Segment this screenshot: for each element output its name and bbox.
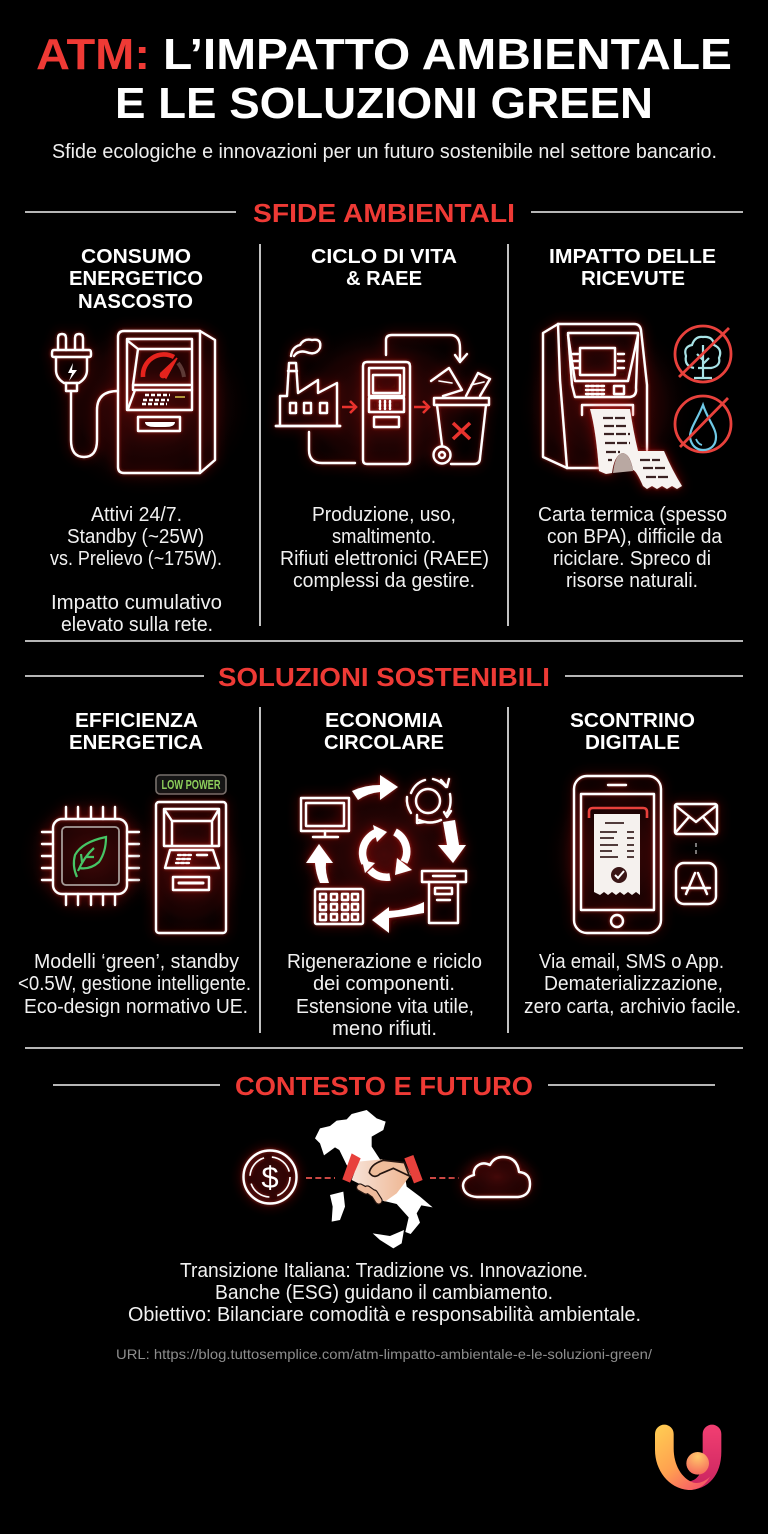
icon: low power badge bbox=[156, 775, 226, 794]
heading: efficienza: EFFICIENZA bbox=[75, 709, 198, 732]
italy map bbox=[315, 1110, 433, 1248]
icon: plug and atm with gauge bbox=[45, 310, 255, 500]
url: URL: https://blog.tuttosemplice.com/atm-limpatto-ambientale-e-le-soluzioni-green/ bbox=[116, 1346, 652, 1362]
heading: consumo: CONSUMO bbox=[81, 245, 191, 268]
text: scontrino: Via email, SMS o App. bbox=[539, 951, 724, 973]
panel: impatto delle ricevute bbox=[515, 245, 731, 592]
icon: circular economy loop bbox=[284, 770, 484, 940]
heading: consumo: NASCOSTO bbox=[78, 290, 193, 313]
text: contesto bbox=[128, 1260, 641, 1326]
heading: ciclo bbox=[311, 245, 457, 290]
text: scontrino: Dematerializzazione, bbox=[544, 973, 723, 995]
icon: no trees bbox=[675, 326, 731, 382]
heading: scontrino: DIGITALE bbox=[585, 731, 680, 754]
handshake bbox=[342, 1153, 423, 1202]
heading: ricevute: IMPATTO DELLE bbox=[549, 245, 716, 268]
heading: consumo bbox=[69, 245, 203, 313]
heading: scontrino: SCONTRINO bbox=[570, 709, 695, 732]
text: ciclo: Produzione, uso, bbox=[312, 504, 456, 526]
text: efficienza: Eco-design normativo UE. bbox=[24, 996, 248, 1018]
text: efficienza bbox=[18, 951, 251, 1018]
panel: scontrino digitale bbox=[524, 709, 741, 1018]
text: economia: dei componenti. bbox=[313, 973, 455, 995]
icon: app tile bbox=[676, 843, 716, 904]
icon: phone with digital receipt bbox=[543, 770, 693, 940]
heading: economia bbox=[324, 709, 444, 754]
heading: economia: ECONOMIA bbox=[325, 709, 443, 732]
icon: atm with receipt bbox=[515, 315, 695, 495]
icon: cloud bbox=[449, 1147, 545, 1207]
icon: dollar coin: $ bbox=[261, 1160, 279, 1195]
text: ciclo: Rifiuti elettronici (RAEE) bbox=[280, 548, 489, 570]
title: L’IMPATTO AMBIENTALE bbox=[163, 30, 732, 79]
text: economia: Rigenerazione e riciclo bbox=[287, 951, 482, 973]
text: efficienza: Modelli ‘green’, standby bbox=[34, 951, 239, 973]
heading: ricevute: RICEVUTE bbox=[581, 267, 685, 290]
icon: green chip bbox=[17, 786, 167, 926]
text: ciclo: complessi da gestire. bbox=[293, 570, 475, 592]
text: ricevute bbox=[538, 504, 727, 592]
panel: efficienza energetica bbox=[17, 709, 251, 1018]
panel: ciclo di vita bbox=[275, 245, 495, 592]
heading: economia: CIRCOLARE bbox=[324, 731, 444, 754]
heading: ricevute bbox=[549, 245, 716, 290]
text: ricevute: risorse naturali. bbox=[566, 570, 698, 592]
section heading: contesto e futuro: CONTESTO E FUTURO bbox=[235, 1071, 533, 1101]
text: scontrino bbox=[524, 951, 741, 1018]
text: efficienza: <0.5W, gestione intelligente. bbox=[18, 973, 251, 995]
icon: green atm bbox=[130, 793, 250, 943]
connector dashes bbox=[306, 1175, 459, 1180]
text: contesto: Obiettivo: Bilanciare comodità e responsabilità ambientale. bbox=[128, 1304, 641, 1326]
text: ricevute: riciclare. Spreco di bbox=[553, 548, 711, 570]
text: contesto: Banche (ESG) guidano il cambiamento. bbox=[215, 1282, 553, 1304]
panel: consumo energetico nascosto bbox=[45, 245, 255, 636]
text: consumo: vs. Prelievo (~175W). bbox=[50, 548, 222, 570]
heading: consumo: ENERGETICO bbox=[69, 267, 203, 290]
text: consumo: Standby (~25W) bbox=[67, 526, 204, 548]
logo bbox=[655, 1425, 721, 1490]
text: ricevute: con BPA), difficile da bbox=[547, 526, 723, 548]
text: contesto: Transizione Italiana: Tradizione vs. Innovazione. bbox=[180, 1260, 588, 1282]
text: consumo: Attivi 24/7. bbox=[91, 504, 182, 526]
text: ciclo: smaltimento. bbox=[332, 526, 436, 548]
text: ciclo bbox=[280, 504, 489, 592]
text: economia bbox=[287, 951, 482, 1040]
text: scontrino: zero carta, archivio facile. bbox=[524, 996, 741, 1018]
text: economia: Estensione vita utile, bbox=[296, 996, 474, 1018]
section heading: sfide ambientali: SFIDE AMBIENTALI bbox=[253, 198, 515, 228]
text: economia: meno rifiuti. bbox=[332, 1018, 437, 1040]
icon: low power badge: LOW POWER bbox=[162, 778, 220, 792]
title bbox=[36, 30, 732, 128]
heading: scontrino bbox=[570, 709, 695, 754]
icon: mail bbox=[675, 804, 717, 834]
title: ATM: bbox=[36, 30, 150, 79]
icon: lifecycle factory to bin bbox=[275, 320, 495, 490]
text: consumo bbox=[50, 504, 222, 636]
heading: ciclo: & RAEE bbox=[346, 267, 422, 290]
heading: efficienza bbox=[69, 709, 203, 754]
icon: italy map with handshake bbox=[306, 1110, 459, 1248]
heading: efficienza: ENERGETICA bbox=[69, 731, 203, 754]
panel: economia circolare bbox=[284, 709, 484, 1040]
heading: ciclo: CICLO DI VITA bbox=[311, 245, 457, 268]
icon: no water bbox=[675, 396, 731, 452]
subtitle: Sfide ecologiche e innovazioni per un futuro sostenibile nel settore bancario. bbox=[52, 141, 717, 163]
text: consumo: Impatto cumulativo bbox=[51, 592, 222, 614]
title: E LE SOLUZIONI GREEN bbox=[115, 79, 653, 128]
section heading: soluzioni sostenibili: SOLUZIONI SOSTENIBILI bbox=[218, 662, 550, 692]
text: consumo: elevato sulla rete. bbox=[61, 614, 213, 636]
icon: dollar coin bbox=[230, 1137, 310, 1217]
text: ricevute: Carta termica (spesso bbox=[538, 504, 727, 526]
